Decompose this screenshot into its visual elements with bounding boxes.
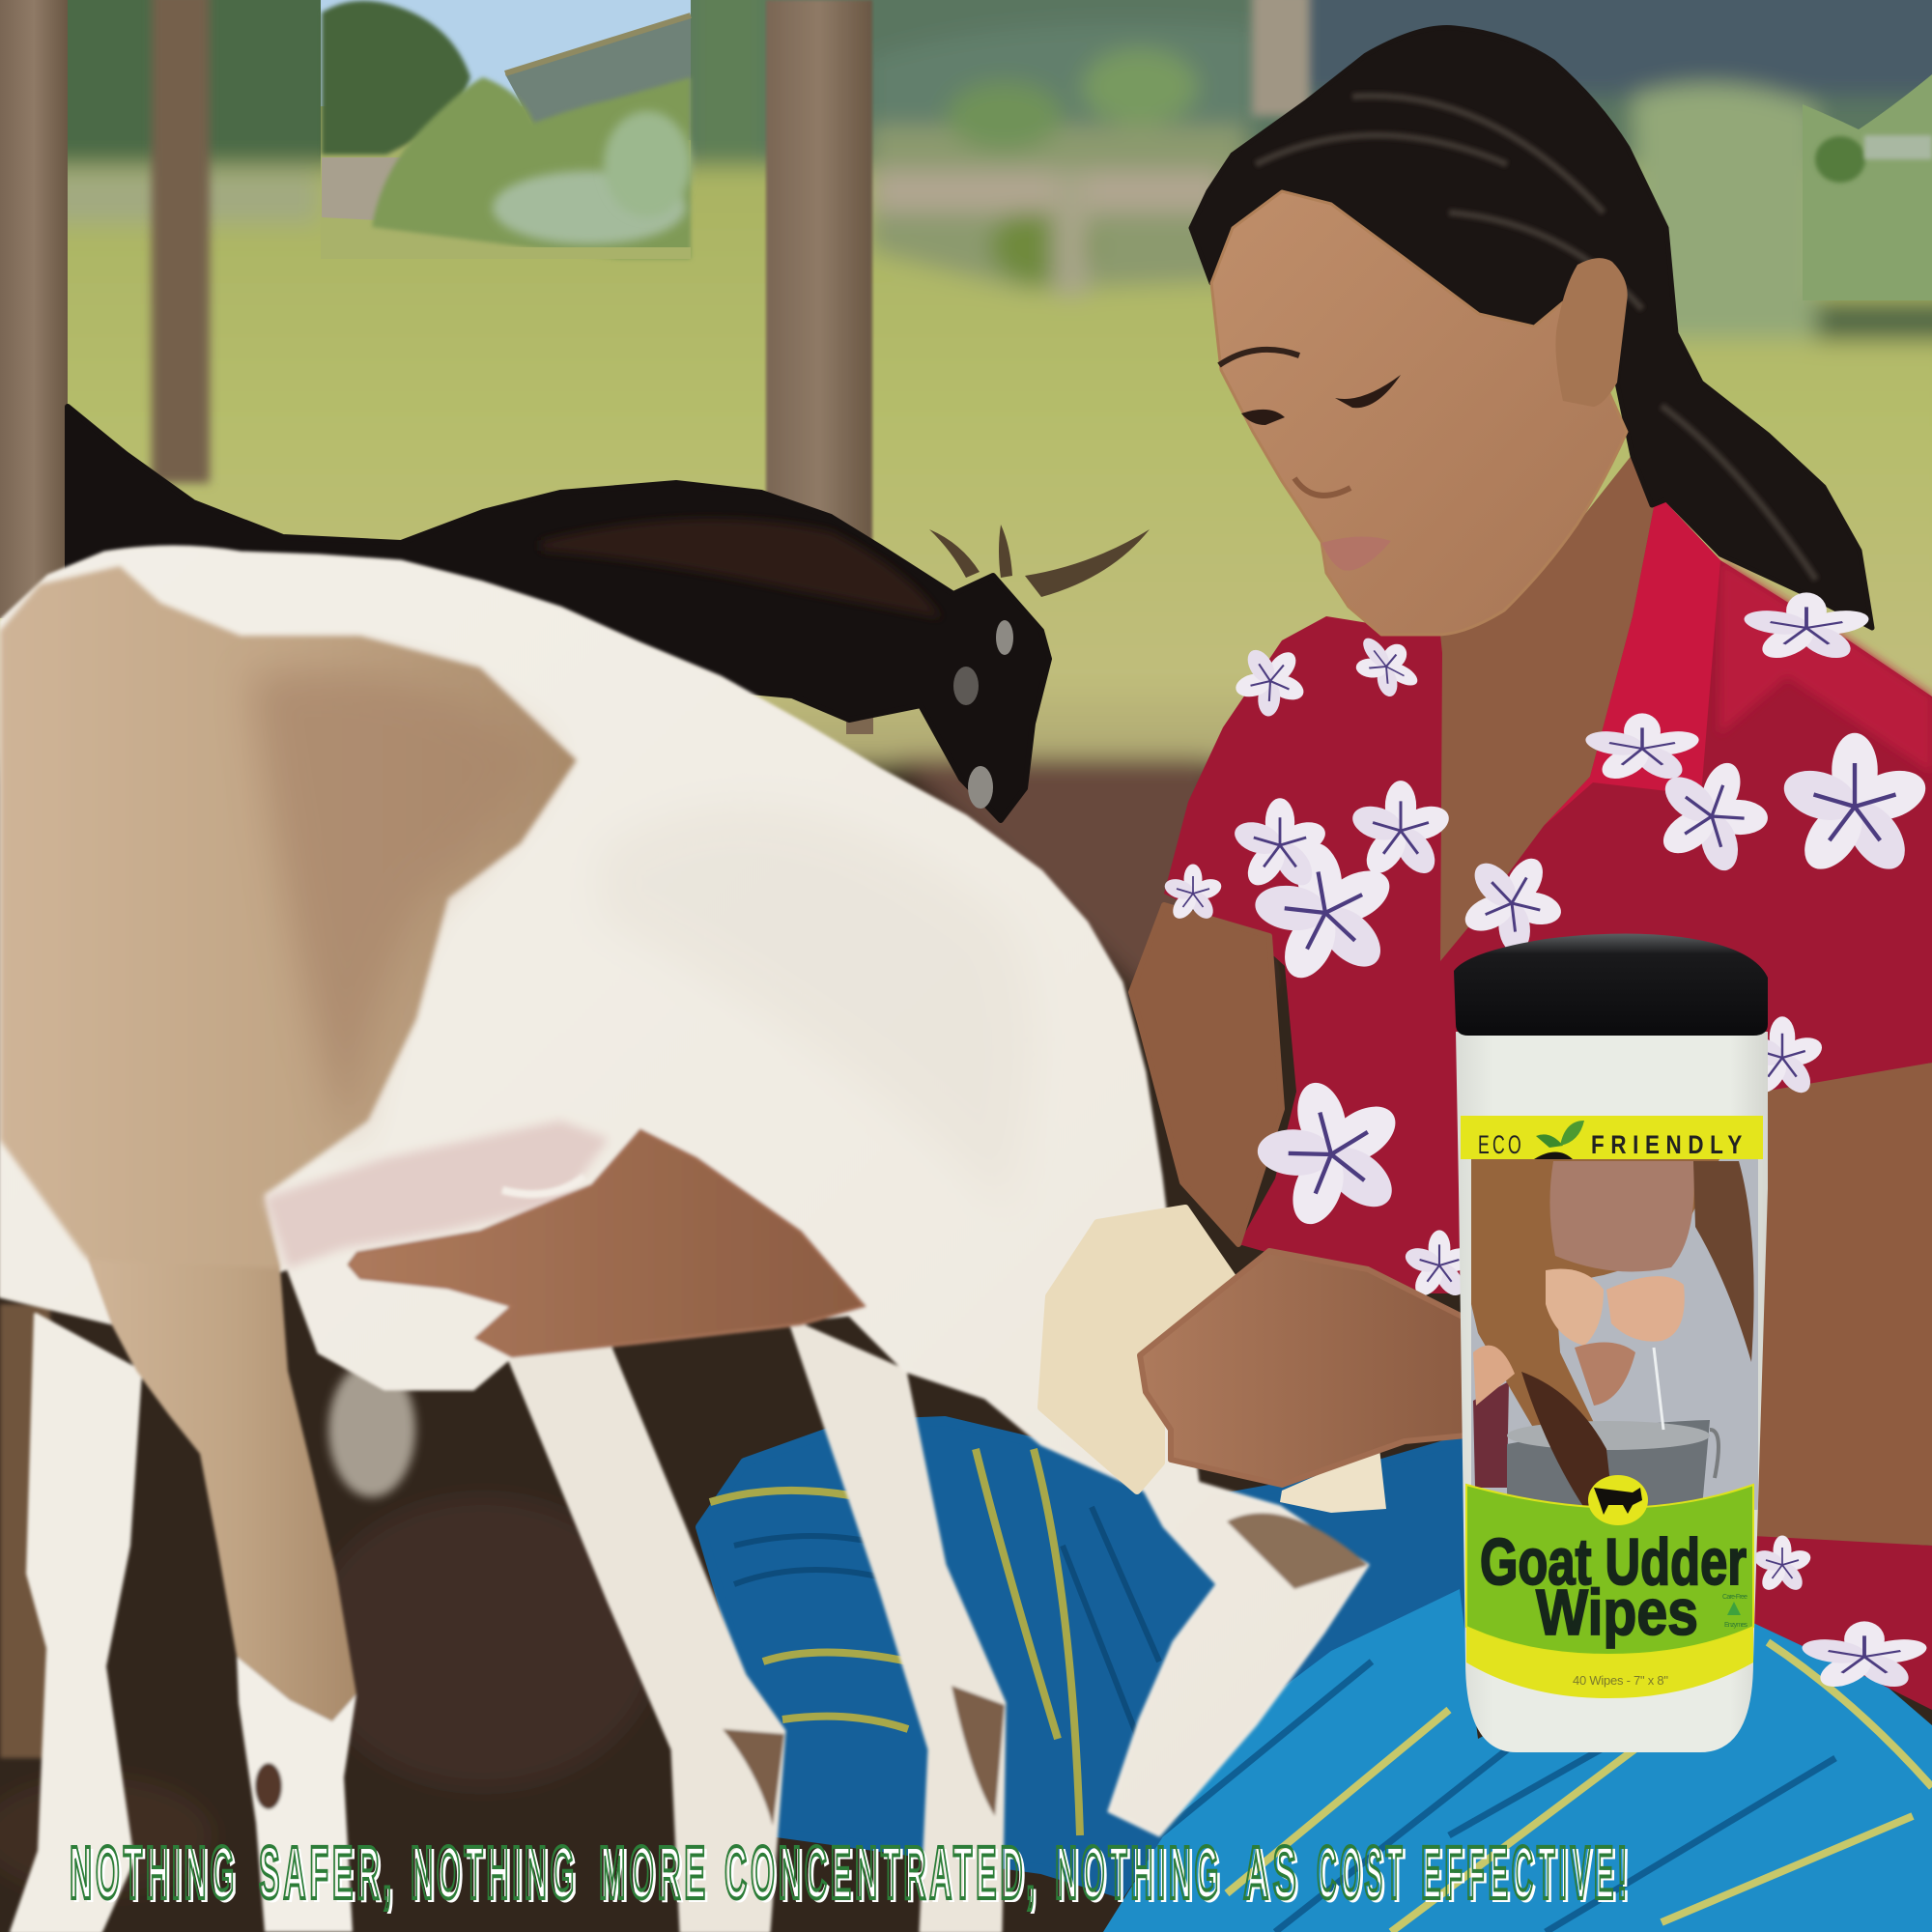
infographic scene: EFFECTIVE! <box>1421 1832 1631 1915</box>
goat face markings <box>953 620 1013 809</box>
fur shading <box>599 806 1034 1208</box>
goat badge <box>1588 1475 1648 1525</box>
blurred goat legs behind <box>328 1362 415 1497</box>
canister lid <box>1454 933 1768 1036</box>
slogan: NOTHING <box>72 1834 241 1918</box>
slogan: NOTHING <box>1058 1834 1225 1918</box>
slogan: NOTHING <box>70 1832 238 1915</box>
tail tuft <box>1227 1513 1368 1589</box>
eco friendly band: ECO <box>1478 1130 1524 1159</box>
tan patch <box>0 566 577 1268</box>
slogan: MORE <box>599 1832 709 1915</box>
left forearm <box>1131 905 1282 1244</box>
enzyme badge <box>1722 1594 1748 1629</box>
infographic scene: EFFECTIVE! <box>1424 1834 1634 1918</box>
ear <box>1555 258 1628 407</box>
udder <box>265 1121 609 1268</box>
product: Goat Udder Wipes canister <box>1454 933 1768 1752</box>
neck and chest <box>1440 454 1657 961</box>
eco friendly band <box>1461 1116 1763 1159</box>
wooden posts <box>0 0 1310 1758</box>
slogan: COST <box>1317 1832 1406 1915</box>
slogan: NOTHING <box>1055 1832 1222 1915</box>
yellow band <box>1466 1627 1753 1698</box>
top landscape inset <box>321 0 691 259</box>
tan leg <box>88 1198 356 1721</box>
quantity text: 40 Wipes - 7" x 8" <box>1573 1673 1668 1688</box>
icon: horns and ear <box>929 525 1150 597</box>
shirt flowers <box>1162 592 1932 1691</box>
enzyme badge: Enzymes <box>1724 1622 1748 1629</box>
product name <box>1480 1524 1747 1649</box>
skirt: blue fabric <box>700 1421 1932 1932</box>
goat legs <box>12 1315 1005 1932</box>
collar <box>1544 493 1720 826</box>
product name: Wipes <box>1536 1577 1698 1649</box>
shirt shoulder highlight <box>1719 560 1932 773</box>
green label <box>1466 1485 1753 1655</box>
shirt <box>1164 493 1932 1710</box>
woman <box>700 28 1932 1932</box>
slogan: SAFER, <box>262 1834 398 1918</box>
slogan: COST <box>1320 1834 1408 1918</box>
right landscape inset <box>1803 74 1932 300</box>
slogan: AS <box>1246 1834 1303 1918</box>
face <box>1211 191 1627 635</box>
right arm <box>1753 1063 1932 1546</box>
white goat <box>0 547 1368 1932</box>
slogan: CONCENTRATED, <box>727 1834 1041 1918</box>
eco friendly band: FRIENDLY <box>1591 1130 1748 1159</box>
slogan: NOTHING <box>411 1832 578 1915</box>
slogan: CONCENTRATED, <box>724 1832 1038 1915</box>
icon: leaf sprout <box>1534 1121 1584 1159</box>
slogan: AS <box>1243 1832 1300 1915</box>
white sock <box>237 1657 356 1932</box>
slogan: NOTHING <box>413 1834 581 1918</box>
enzyme badge: Care-Free <box>1722 1594 1747 1601</box>
milking hand <box>349 1130 865 1356</box>
goat body <box>0 547 1368 1835</box>
slogan <box>70 1832 1634 1918</box>
product name: Goat Udder <box>1480 1524 1747 1599</box>
cleaning hand <box>1140 1251 1466 1485</box>
cloth and cleaning hand <box>1041 1208 1466 1513</box>
slogan: SAFER, <box>259 1832 395 1915</box>
canister body <box>1456 1032 1768 1752</box>
eyes, nose, mouth <box>1219 350 1401 571</box>
hair <box>1191 28 1872 628</box>
photo on label <box>1471 1157 1758 1510</box>
black goat <box>68 407 1150 820</box>
slogan: MORE <box>602 1834 712 1918</box>
